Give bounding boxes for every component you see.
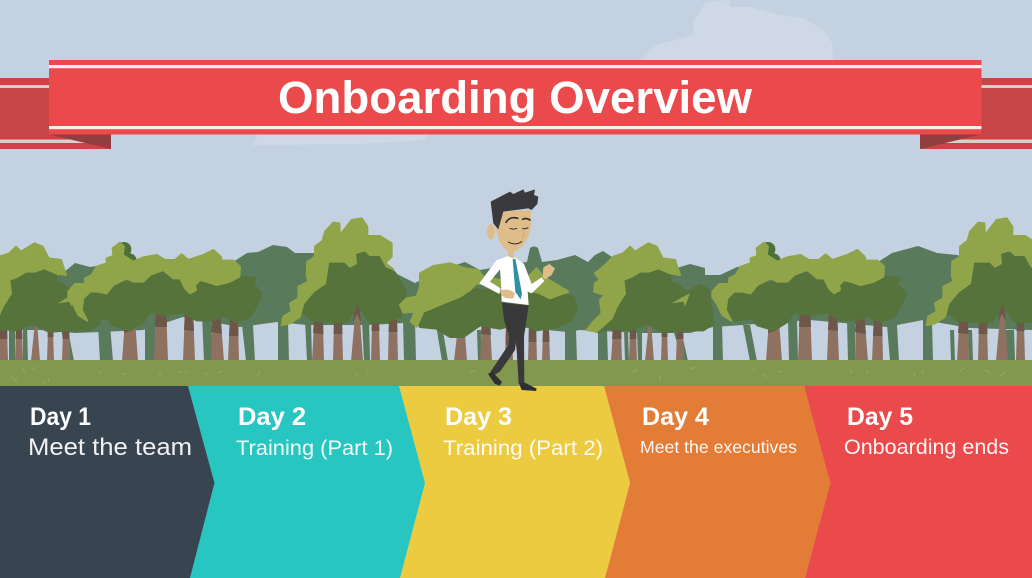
labels: day 3	[443, 403, 603, 460]
chevron: day 2	[188, 386, 425, 578]
labels: day 4	[640, 403, 797, 457]
character: walking businessman	[479, 189, 555, 391]
labels: day 1	[28, 403, 192, 461]
shirt	[479, 256, 544, 305]
ribbon main	[49, 60, 982, 134]
shoes	[488, 371, 537, 391]
labels: day 4: Meet the executives	[640, 437, 797, 457]
labels: day 1: Day 1	[30, 403, 91, 431]
chevron: day 3	[399, 386, 630, 578]
labels: day 2: Training (Part 1)	[236, 436, 393, 460]
labels: day 2: Day 2	[238, 403, 306, 431]
labels: day 5: Day 5	[847, 403, 913, 431]
hands and neck	[500, 248, 555, 299]
title banner	[0, 60, 1032, 149]
front trees: right group	[587, 218, 1032, 361]
back leg	[491, 303, 517, 375]
grass strip	[0, 360, 1032, 386]
labels: day 1: Meet the team	[28, 434, 192, 461]
face details	[506, 218, 530, 244]
chevron: day 1	[0, 386, 214, 578]
front leg	[512, 304, 529, 384]
labels: day 5: Onboarding ends	[844, 436, 1009, 459]
labels: day 5	[844, 403, 1009, 459]
ribbon tail left	[0, 78, 111, 149]
tree behind the character	[400, 263, 577, 361]
labels: day 2	[236, 403, 393, 460]
front trees: left group	[0, 218, 405, 361]
back trees	[0, 245, 1032, 361]
ear	[487, 224, 495, 239]
hair	[491, 189, 538, 229]
head	[495, 210, 531, 252]
labels: day 3: Day 3	[445, 403, 512, 431]
title: Onboarding Overview	[278, 72, 753, 123]
timeline chevrons	[0, 386, 1032, 578]
labels: day 3: Training (Part 2)	[443, 436, 603, 460]
cloud	[252, 0, 833, 145]
ribbon tail right	[920, 78, 1032, 149]
labels: day 4: Day 4	[642, 403, 709, 431]
tie	[513, 259, 522, 299]
chevron: day 5	[804, 386, 1032, 578]
chevron: day 4	[604, 386, 830, 578]
